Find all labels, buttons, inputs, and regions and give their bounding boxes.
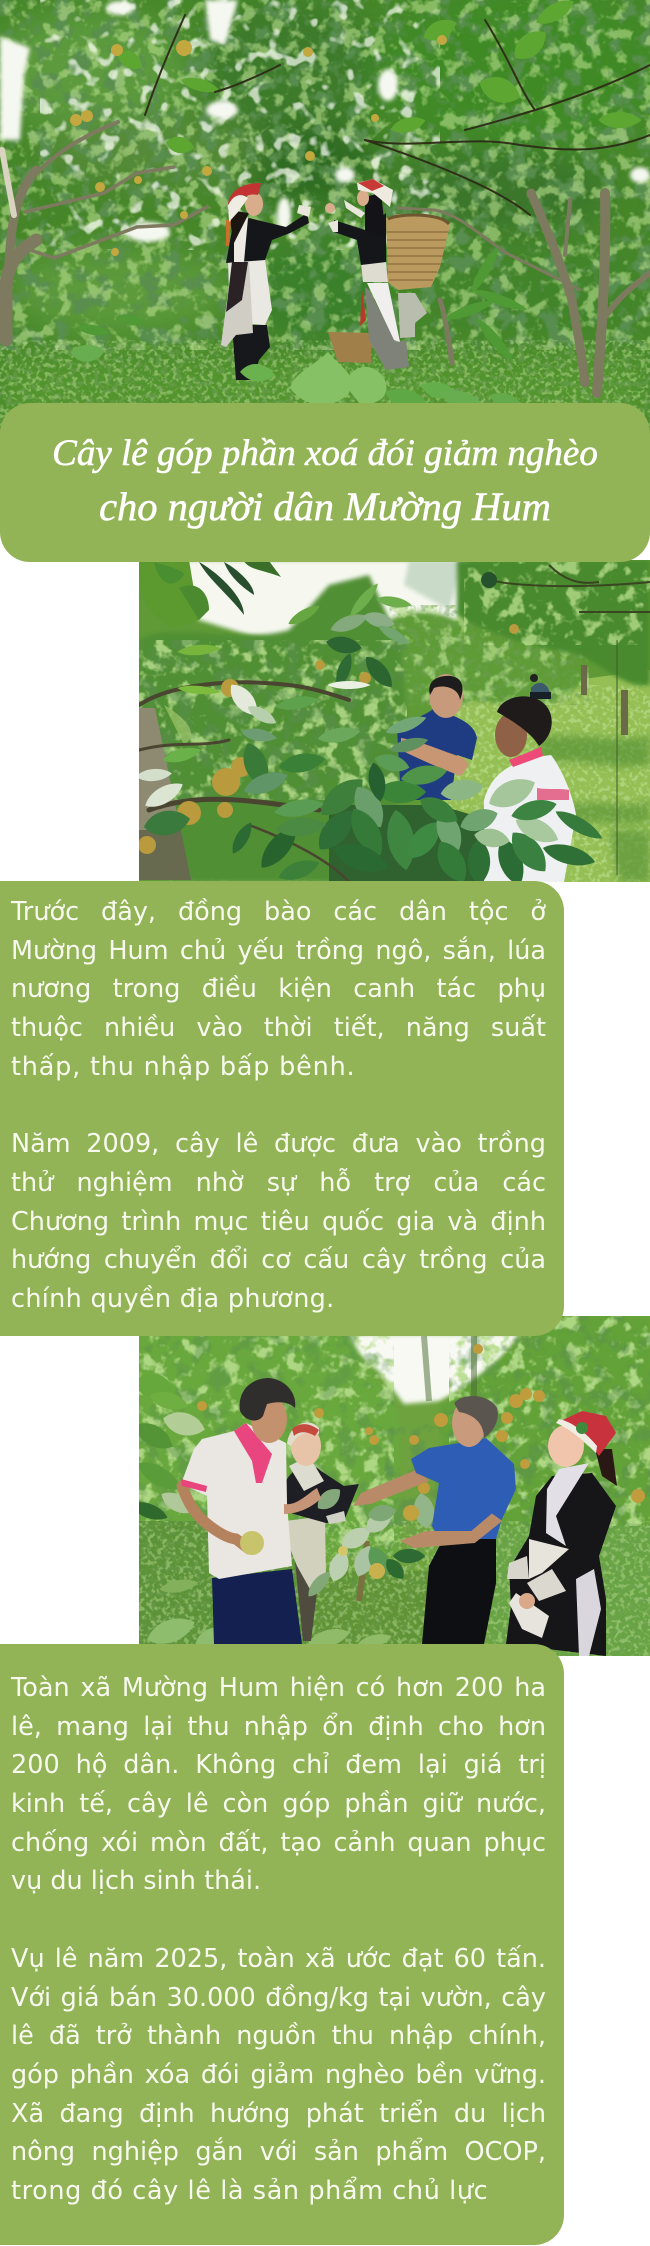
paragraph text: kinh tế, cây lê còn góp phần giữ nước, (11, 1789, 546, 1819)
paragraph text: nương trong điều kiện canh tác phụ (11, 974, 546, 1004)
mid foliage mass, left (139, 575, 407, 882)
woman with basket, right (325, 179, 427, 370)
paragraph text: lê, mang lại thu nhập ổn định cho hơn (11, 1712, 546, 1742)
paragraph text: thử nghiệm nhờ sự hỗ trợ của các (11, 1168, 546, 1198)
paragraph text: Vụ lê năm 2025, toàn xã ước đạt 60 tấn. (11, 1944, 546, 1974)
paragraph text: Năm 2009, cây lê được đưa vào trồng (11, 1129, 546, 1159)
foreground large leaves (136, 580, 606, 889)
paragraph text: góp phần xóa đói giảm nghèo bền vững. (11, 2060, 546, 2090)
dark shade beneath the front branches (329, 805, 489, 882)
branches (139, 682, 349, 882)
paragraph text: thấp, thu nhập bấp bênh. (11, 1052, 355, 1082)
orchard foliage (139, 1316, 650, 1556)
man in blue shirt (397, 674, 477, 800)
title text (52, 433, 598, 529)
title text: Cây lê góp phần xoá đói giảm nghèo (52, 433, 598, 474)
paragraph text: hướng chuyển đổi cơ cấu cây trồng của (11, 1245, 546, 1275)
man in white shirt seen from behind (484, 696, 576, 882)
mid-distance trees (389, 605, 589, 710)
sunny grass slope (439, 670, 650, 882)
bright leaf clusters (113, 0, 642, 155)
young plants behind the pickers (76, 244, 529, 365)
pears (138, 624, 519, 854)
paragraph text: chống xói mòn đất, tạo cảnh quan phục (11, 1828, 546, 1858)
sky (329, 1334, 519, 1404)
paragraph text: trong đó cây lê là sản phẩm chủ lực (11, 2176, 488, 2206)
sky and distant hill (164, 560, 469, 645)
foreground pumpkin leaves (70, 345, 522, 414)
pears on branches (197, 1344, 645, 1503)
paragraph text: chính quyền địa phương. (11, 1284, 335, 1314)
paragraph text: Toàn xã Mường Hum hiện có hơn 200 ha (11, 1673, 546, 1703)
photo: two men and two women in dress among pear trees (139, 1316, 650, 1656)
text panel: income and the 2025 crop (0, 1644, 564, 2245)
man in white and pink shirt holding a pear (181, 1378, 321, 1644)
upper left dark leaves (139, 560, 281, 628)
man in blue shirt pointing at the branch (353, 1396, 516, 1644)
paragraph text: Trước đây, đồng bào các dân tộc ở (11, 897, 546, 927)
central young pear tree with leaves (304, 1484, 437, 1601)
paragraph text: Xã đang định hướng phát triển du lịch (11, 2099, 546, 2129)
grass (139, 1521, 309, 1656)
paragraph text: vụ du lịch sinh thái. (11, 1866, 261, 1896)
far worker crouching (530, 674, 551, 699)
tree trunks and branches (2, 15, 650, 393)
paragraph text: nông nghiệp gắn với sản phẩm OCOP, (11, 2137, 546, 2167)
paragraph text: thuộc nhiều vào thời tiết, năng suất (11, 1013, 546, 1043)
photo: two women in ethnic dress picking pears in an orchard (0, 0, 650, 432)
woman in the back, left (283, 1422, 359, 1641)
woman in black dress with red scarf (506, 1411, 617, 1656)
sky gaps between the leaves (0, 0, 650, 250)
text panel: before pear trees and the 2009 pilot (0, 881, 564, 1336)
tree trunk (139, 708, 191, 880)
paragraph text (10, 1673, 546, 2206)
photo: officer talks with farmer under pear branches (139, 560, 650, 882)
pear fruits (70, 35, 447, 256)
small basket on the ground (328, 332, 371, 363)
title text: cho người dân Mường Hum (99, 484, 551, 529)
canopy light and shade (0, 0, 650, 475)
paragraph text (10, 897, 546, 1314)
paragraph text: Mường Hum chủ yếu trồng ngô, sắn, lúa (11, 936, 546, 966)
paragraph text: Chương trình mục tiêu quốc gia và định (11, 1206, 546, 1236)
paragraph text: lê đã trở thành nguồn thu nhập chính, (11, 2021, 546, 2051)
woven basket on back (386, 214, 450, 290)
paragraph text: Với giá bán 30.000 đồng/kg tại vườn, cây (11, 1982, 546, 2012)
paragraph text: 200 hộ dân. Không chỉ đem lại giá trị (11, 1750, 546, 1780)
title panel (0, 403, 650, 562)
left foliage leaves (128, 1371, 393, 1661)
woman picking pears, left (221, 183, 311, 380)
upper right tree canopy (457, 560, 650, 875)
